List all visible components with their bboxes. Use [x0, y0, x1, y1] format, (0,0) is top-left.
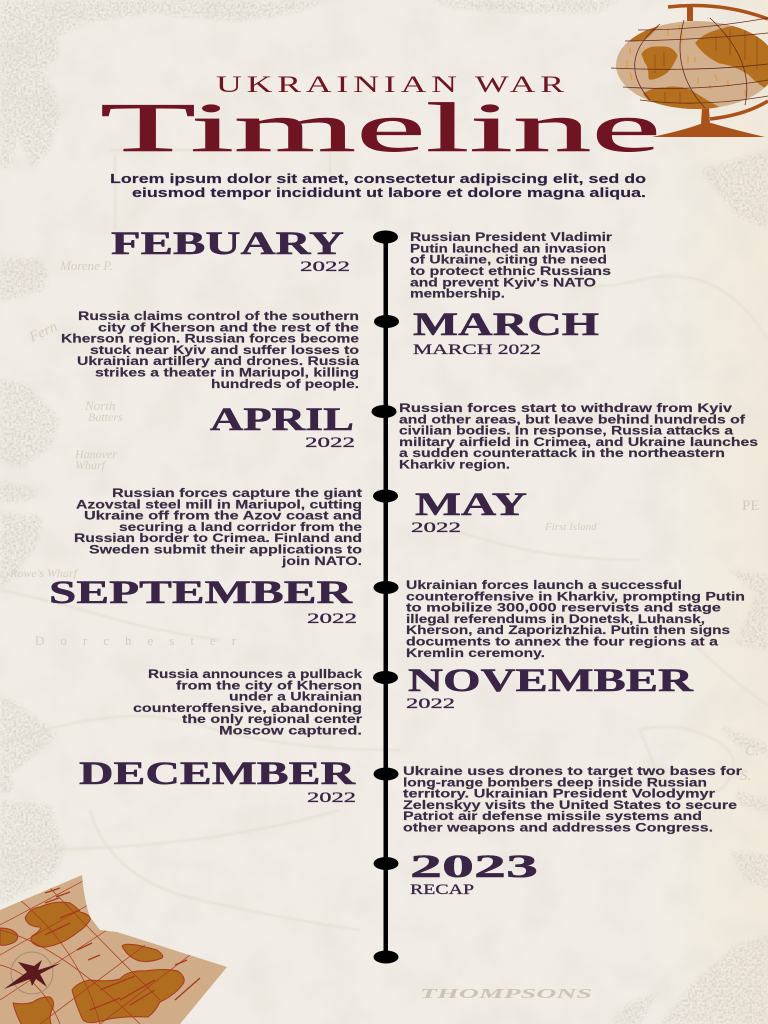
illustration: treasure map [0, 875, 227, 1024]
entry: September 2022 [49, 575, 745, 660]
description: long-range bombers deep inside Russian [403, 777, 707, 789]
faint map lettering: First Island [544, 521, 597, 533]
description: membership. [410, 289, 505, 301]
description [74, 488, 362, 568]
heading: September: SEPTEMBER [49, 575, 354, 611]
description: Kherson, and Zaporizhzhia. Putin then signs [406, 625, 730, 637]
faint map lettering: S. [740, 768, 751, 784]
year: 2022 [305, 435, 355, 451]
intro text: eiusmod tempor incididunt ut labore et dolore magna aliqua. [132, 186, 646, 200]
heading: Febuary: FEBUARY [111, 226, 344, 262]
intro text: Lorem ipsum dolor sit amet, consectetur adipiscing elit, sed do [110, 172, 647, 186]
faint map lettering: THOMPSONS [420, 987, 592, 1002]
description: documents to annex the four regions at a [406, 636, 719, 648]
description [410, 232, 613, 301]
description: Moscow captured. [219, 726, 362, 738]
year: 2022 [307, 790, 356, 806]
entry: December 2022 [79, 756, 743, 834]
description: the only regional center [182, 714, 363, 726]
entry: November 2022 [133, 663, 695, 738]
description: to mobilize 300,000 reservists and stage [406, 603, 721, 615]
description: other weapons and addresses Congress. [403, 822, 713, 834]
heading: May: MAY [415, 487, 527, 523]
description [403, 766, 743, 834]
description: under a Ukrainian [229, 692, 362, 704]
description: Ukraine off from the Azov coast and [84, 511, 362, 523]
faint map lettering [9, 258, 760, 1002]
description: military airfield in Crimea, and Ukraine launches [399, 437, 758, 449]
description [61, 311, 360, 391]
year: 2022 [307, 611, 357, 627]
entry: March 2022 [61, 307, 599, 391]
description: counteroffensive in Kharkiv, prompting Putin [406, 591, 745, 603]
heading: 2023: 2023 [410, 849, 538, 885]
year: 2022 [411, 520, 461, 536]
description: Putin launched an invasion [410, 243, 606, 255]
description: and other areas, but leave behind hundreds of [399, 414, 745, 426]
description [399, 403, 758, 472]
description: securing a land corridor from the [119, 522, 362, 534]
faint map lettering: North [84, 398, 115, 413]
title block [100, 72, 661, 200]
description: a sudden counterattack in the northeastern [399, 448, 725, 460]
description: Ukrainian forces launch a successful [406, 580, 682, 592]
description: and prevent Kyiv's NATO [410, 277, 596, 289]
description: illegal referendums in Donetsk, Luhansk, [406, 614, 705, 626]
description: Sweden submit their applications to [89, 544, 362, 556]
description: Russia claims control of the southern [78, 311, 359, 323]
description: territory. Ukrainian President Volodymyr [403, 789, 716, 801]
icon: compass rose [4, 952, 61, 994]
description: counteroffensive, abandoning [133, 703, 362, 715]
faint map lettering: Wharf [75, 458, 107, 472]
title: Ukrainian War: UKRAINIAN WAR [216, 72, 564, 97]
description [133, 669, 363, 738]
entry: May 2022 [74, 487, 527, 568]
description: stuck near Kyiv and suffer losses to [90, 345, 359, 357]
faint map lettering: Hanover [74, 447, 117, 461]
recap label: RECAP [410, 882, 474, 898]
faint map lettering: Fern [26, 319, 60, 346]
faint map lettering: Morene P. [59, 258, 113, 273]
year: 2022 [300, 259, 350, 275]
icon: globe [611, 6, 768, 137]
title: Timeline: Timeline [100, 90, 661, 167]
description: to protect ethnic Russians [410, 266, 611, 278]
description: Russia announces a pullback [148, 669, 363, 681]
heading: March: MARCH [413, 307, 599, 343]
description: from the city of Kherson [176, 680, 362, 692]
description: Kremlin ceremony. [406, 648, 545, 660]
year: 2022 [406, 696, 455, 712]
description: Russian forces capture the giant [112, 488, 362, 500]
description: Zelenskyy visits the United States to secure [403, 800, 737, 812]
heading: April: APRIL [210, 402, 354, 438]
description: Russian border to Crimea. Finland and [74, 533, 362, 545]
entry: February 2022 [111, 226, 613, 301]
heading: December: DECEMBER [79, 756, 357, 792]
description: Ukrainian artillery and drones. Russia [77, 356, 360, 368]
faint map lettering: Dorchester [35, 633, 252, 648]
description: city of Kherson and the rest of the [98, 322, 359, 334]
heading: November: NOVEMBER [408, 663, 695, 699]
description [406, 580, 745, 660]
description: hundreds of people. [211, 379, 359, 391]
faint map lettering: C. [745, 743, 759, 759]
faint map lettering: PE [742, 498, 760, 514]
description: join NATO. [281, 556, 362, 568]
description: Kherson region. Russian forces become [61, 334, 359, 346]
description: of Ukraine, citing the need [410, 255, 607, 267]
faint map lettering: Batters [88, 410, 123, 424]
entry: April 2022 [210, 402, 758, 472]
description: Russian forces start to withdraw from Kyiv [399, 403, 733, 415]
description: strikes a theater in Mariupol, killing [95, 368, 359, 380]
faint map lettering: Rowe's Wharf [9, 566, 79, 580]
timeline spine with markers [372, 230, 399, 964]
description: Azovstal steel mill in Mariupol, cutting [76, 499, 362, 511]
description: Ukraine uses drones to target two bases for [403, 766, 743, 778]
description: Kharkiv region. [399, 460, 510, 472]
intro text [110, 172, 647, 200]
year: MARCH 2022 [413, 342, 541, 358]
description: civilian bodies. In response, Russia attacks a [399, 426, 734, 438]
entry: 2023 recap [410, 849, 538, 898]
description: Russian President Vladimir [410, 232, 613, 244]
description: Patriot air defense missile systems and [403, 811, 702, 823]
